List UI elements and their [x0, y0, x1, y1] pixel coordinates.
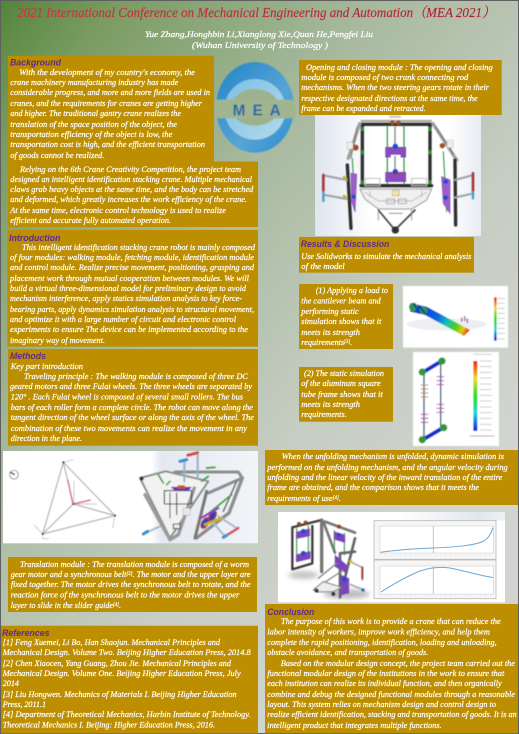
text: translation module: [4] — [113, 603, 119, 608]
authors: (Wuhan University of Technology ) — [192, 40, 328, 50]
text: methods: direction in the plane. — [11, 433, 82, 443]
panel: references — [1, 626, 258, 734]
panel: opening and closing module — [299, 60, 502, 115]
diagram: three wheel geometry — [10, 459, 116, 539]
chart: linear velocity curve — [374, 560, 496, 599]
text: introduction: imaginary way of movement. — [10, 335, 105, 345]
text: dynamic simulation: . — [339, 493, 341, 503]
text: conclusion: layout. This system relies on mechanism design and control design to — [267, 699, 496, 709]
text: methods — [10, 361, 254, 443]
text: introduction: mechanism interference, apply statics simulation analysis to key force- — [10, 293, 242, 303]
heading: introduction: Introduction — [9, 233, 61, 243]
text: opening and closing module: respective designated directions at the same time, the — [301, 93, 478, 103]
logo: MEA: M E A — [233, 102, 281, 119]
text: references: [1] Feng Xuemei, Li Bo, Han Shaojun. Mechanical Principles and — [3, 637, 221, 647]
text: conclusion — [267, 616, 517, 730]
text: references: 2014 — [3, 678, 20, 688]
panel: introduction — [7, 230, 258, 347]
panel: translation module — [8, 557, 257, 612]
panel: dynamic simulation — [265, 450, 518, 505]
text: introduction: placement work through mutual cooperation between modules. We will — [9, 273, 250, 283]
panel: background — [8, 56, 258, 227]
text: methods: Key part introduction — [10, 361, 83, 371]
panel: cantilever beam simulation text: (1) Applying a load to — [316, 285, 388, 295]
panel: conclusion — [265, 604, 518, 733]
text: translation module: layer to slide in the slider guide — [11, 600, 119, 610]
panel: cantilever beam simulation text: the cantilever beam and — [301, 296, 381, 306]
text: conclusion: combine and debug the designed functional modules through a reasonable — [267, 689, 515, 699]
panel: aluminum frame simulation text: (2) The static simulation — [304, 368, 384, 378]
text: introduction: of four modules: walking module, fetching module, identification module — [10, 252, 254, 262]
text: opening and closing module: Opening and closing module : The opening and closing — [306, 62, 493, 72]
panel: aluminum frame simulation text — [299, 367, 393, 422]
text: opening and closing module: mechanisms. When the two steering gears rotate in their — [301, 82, 490, 92]
text: background: claws grab heavy objects at the same time, and the body can be stretched — [10, 184, 254, 194]
text: background: efficient and accurate fully automated operation. — [10, 215, 171, 225]
text: methods: geared motors and three Fulai wheels. The three wheels are separated by — [10, 381, 252, 391]
text: dynamic simulation: requirements of use — [267, 493, 334, 503]
text: background: With the development of my country's economy, the — [19, 67, 195, 77]
authors — [145, 29, 373, 50]
text: references: [4] Department of Theoretical Mechanics, Harbin Institute of Technology. — [3, 709, 251, 719]
heading: background: Background — [10, 58, 61, 68]
text: translation module: Translation module : The translation module is composed of a worm — [20, 559, 249, 569]
chart: angular velocity curve — [374, 521, 496, 559]
text: background: translation of the space position of the object, the — [10, 119, 177, 129]
text: conclusion: labor intensity of workers, improve work efficiency, and help them — [267, 626, 490, 636]
text: introduction: and control module. Realize precise movement, positioning, grasping and — [10, 262, 255, 272]
text: dynamic simulation — [266, 451, 508, 503]
heading: results and discussion: Results & Discussion — [301, 239, 390, 249]
text: background: of goods cannot be realized. — [10, 150, 104, 160]
text: references — [2, 637, 251, 730]
text: translation module: [3] — [126, 572, 133, 577]
text: conclusion: obstacle avoidance, and transportation of goods. — [267, 647, 428, 657]
text: background: transportation efficiency of the object is low, the — [10, 129, 173, 139]
text: results intro: Use Solidworks to simulate the mechanical analysis — [301, 251, 472, 261]
text: dynamic simulation: unfolding and the linear velocity of the inward translation of the entire — [267, 472, 503, 482]
text: opening and closing module: module is composed of two crank connecting rod — [301, 72, 469, 82]
text: translation module: fixed together. The motor drives the synchronous belt to rotate, and the — [11, 579, 251, 589]
text: dynamic simulation: performed on the unfolding mechanism, and the angular velocity during — [266, 462, 508, 472]
text: references: Mechanical Design. Volume Two. Beijing Higher Education Press, 2014.8 — [2, 647, 251, 657]
text: methods: Traveling principle : The walking module is composed of three DC — [24, 371, 248, 381]
panel: cantilever beam simulation text: . — [350, 337, 352, 347]
text: background: designed an intelligent identification stacking crane. Multiple mechanical — [10, 174, 253, 184]
text: background: cranes, and the requirements for cranes are getting higher — [10, 98, 203, 108]
panel: results and discussion — [299, 237, 474, 273]
text: background: crane machinery manufacturing industry has made — [10, 77, 179, 87]
text: conclusion: functional modular design of the institutions in the work to ensure that — [267, 668, 505, 678]
text: introduction: experiments to ensure The device can be implemented according to the — [10, 324, 248, 334]
text: references: [3] Liu Hongwen. Mechanics of Materials I. Beijing Higher Education — [3, 689, 237, 699]
text: translation module: reaction force of the synchronous belt to the motor drives the upper — [11, 590, 240, 600]
panel: aluminum frame simulation text: meets its strength — [301, 399, 360, 409]
text: background: considerable progress, and more and more fields are used in — [10, 87, 210, 97]
text: conclusion: Based on the modular design concept, the project team carried out the — [281, 658, 515, 668]
text: references: Mechanical Design. Volume One. Beijing Higher Education Press, July — [2, 668, 241, 678]
text: conclusion: each institution can realize its individual function, and then organically — [267, 678, 502, 688]
text: translation module: . The motor and the upper layer are — [133, 569, 251, 579]
text: conclusion: The purpose of this work is to provide a crane that can reduce the — [281, 616, 501, 626]
text: translation module: gear motor and a synchronous belt — [11, 569, 130, 579]
render: translation module — [140, 453, 242, 540]
panel: cantilever beam simulation text: performing static — [300, 306, 359, 316]
figure: crane frame front view — [315, 115, 481, 236]
text: references: Theoretical Mechanics I. Beijing: Higher Education Press, 2016. — [3, 720, 215, 730]
text: conclusion: intelligent product that integrates multiple functions. — [267, 720, 442, 730]
text: background: and higher. The traditional gantry crane realizes the — [10, 108, 181, 118]
chart: aluminum frame stress simulation — [413, 352, 499, 446]
text: methods: bars of each roller form a complete circle. The robot can move along the — [11, 402, 253, 412]
text: translation module — [11, 559, 251, 610]
panel: cantilever beam simulation text: simulation shows that it — [301, 316, 382, 326]
panel: aluminum frame simulation text: tube frame shows that it — [301, 389, 383, 399]
panel: cantilever beam simulation text — [299, 284, 393, 349]
text: dynamic simulation: [4] — [333, 496, 339, 501]
chart: cantilever beam stress simulation — [403, 286, 508, 348]
text: references: [2] Chen Xiaocen, Yang Guang, Zhou Jie. Mechanical Principles and — [3, 658, 232, 668]
text: opening and closing module: frame can be expanded and retracted. — [301, 103, 426, 113]
text: introduction: build a virtual three-dimensional model for preliminary design to avoid — [10, 283, 247, 293]
text: conclusion: realize efficient identification, stacking and transportation of goods. It is an — [267, 709, 517, 719]
text: introduction: This intelligent identification stacking crane robot is mainly composed — [22, 242, 256, 252]
text: background — [9, 67, 254, 225]
text: methods: combination of these two movements can realize the movement in any — [11, 423, 247, 433]
panel: cantilever beam simulation text: [3] — [344, 340, 350, 345]
panel: methods — [8, 349, 258, 446]
text: translation module: . — [119, 600, 121, 610]
heading: conclusion: Conclusion — [267, 607, 315, 617]
text: introduction: and optimize it with a large number of circuit and electronic control — [10, 314, 237, 324]
render: crane 3D view — [288, 520, 370, 599]
text: opening and closing module — [301, 62, 493, 113]
text: background: transportation cost is high, and the efficient transportation — [10, 139, 205, 149]
heading: references: References — [2, 628, 50, 638]
text: references: Press, 2011.1 — [2, 699, 46, 709]
text: conclusion: complete the rapid positioning, identification, loading and unloading, — [267, 637, 497, 647]
text: background: Relying on the 6th Crane Creativity Competition, the project team — [19, 164, 241, 174]
authors: Yue Zhang,Honghbin Li,Xianglong Xie,Quan He,Pengfei Liu — [145, 29, 373, 39]
panel: aluminum frame simulation text: requirements. — [301, 409, 347, 419]
text: dynamic simulation: When the unfolding mechanism is unfolded, dynamic simulation is — [282, 451, 505, 461]
panel: aluminum frame simulation text: of the aluminum square — [301, 378, 381, 388]
text: methods: tangent direction of the wheel surface or along the axis of the wheel. The — [11, 412, 254, 422]
heading: methods: Methods — [10, 351, 46, 361]
text: introduction — [9, 242, 256, 345]
text: background: At the same time, electronic control technology is used to realize — [9, 205, 226, 215]
figure: crane render with velocity charts — [278, 512, 505, 602]
logo: MEA — [215, 62, 295, 153]
panel: cantilever beam simulation text: meets its strength — [301, 327, 360, 337]
figure: walking mechanism diagram and translation module render — [3, 451, 258, 543]
text: background: and deformed, which greatly increases the work efficiency of the crane. — [10, 194, 247, 204]
title: 2021 International Conference on Mechanical Engineering and Automation（MEA 2021） — [17, 5, 495, 21]
text: introduction: bearing parts, apply dynamics simulation analysis to structural movement, — [10, 304, 254, 314]
panel: cantilever beam simulation text: requirements — [301, 337, 346, 347]
text: results intro: of the model — [301, 261, 345, 271]
text: dynamic simulation: frame are obtained, and the comparison shows that it meets the — [267, 482, 479, 492]
text: results intro — [301, 251, 472, 271]
text: methods: 120° . Each Fulai wheel is composed of several small rollers. The bus — [11, 392, 244, 402]
